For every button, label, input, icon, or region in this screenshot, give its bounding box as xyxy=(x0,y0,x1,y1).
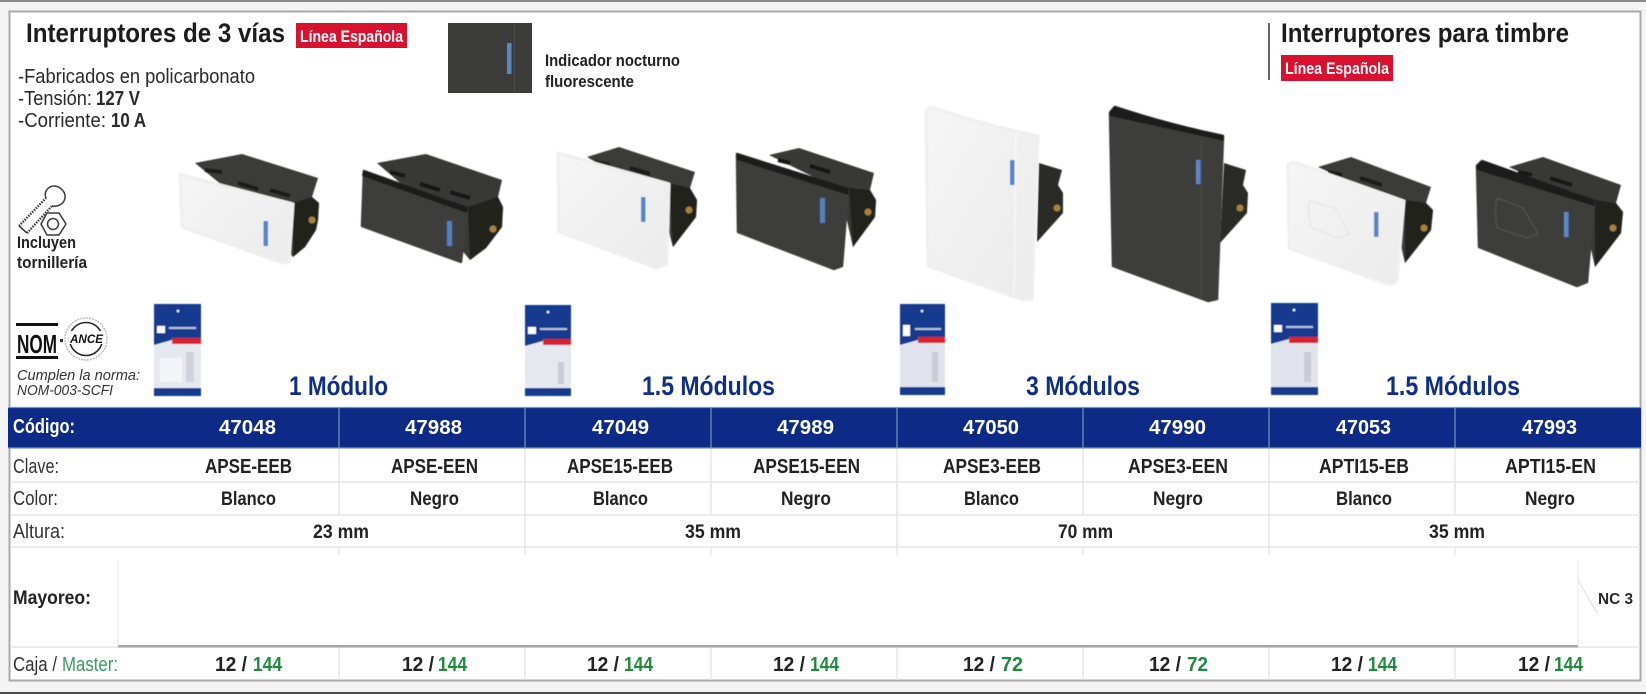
product: switch 47990 black tall xyxy=(1109,106,1248,301)
table row: Caja / Master: 144 xyxy=(438,654,468,676)
table row: Clave: APSE-EEN xyxy=(391,456,478,478)
table row: Caja / Master: 12 / xyxy=(402,654,434,676)
module label: 1.5 Módulos: 1.5 Módulos xyxy=(642,371,775,401)
text block: Indicador nocturno fluorescente: fluorescente xyxy=(545,73,634,91)
table row: Color: Blanco xyxy=(1336,489,1392,510)
table row: Color: Color: xyxy=(13,488,58,510)
text block: specifications: -Corriente: xyxy=(18,110,106,132)
table row: Caja / Master: 144 xyxy=(624,654,654,676)
table row: Caja / Master: 144 xyxy=(1368,654,1398,676)
table row: Clave: APSE3-EEN xyxy=(1128,456,1228,478)
table row: Color xyxy=(13,488,1575,510)
table row: Caja / Master: 12 / xyxy=(1331,654,1363,676)
text block: norm note xyxy=(17,367,140,399)
table header: Código row xyxy=(8,407,1641,448)
text block: norm note: NOM-003-SCFI xyxy=(17,382,113,399)
table row: Caja / Master xyxy=(13,654,1584,676)
table row: Clave: APSE3-EEB xyxy=(943,456,1041,478)
table row: Color: Blanco xyxy=(964,489,1019,510)
text block: specifications: 127 V xyxy=(96,88,141,110)
table row: Mayoreo: Mayoreo: xyxy=(13,588,91,609)
icon: night indicator swatch xyxy=(448,23,532,93)
text block: Indicador nocturno fluorescente: Indicador nocturno xyxy=(545,52,680,70)
table header: Código row: Código: xyxy=(13,416,75,438)
table row: Color: Blanco xyxy=(221,489,276,510)
product: switch 47050 white tall xyxy=(926,107,1063,300)
table row: Caja / Master: 12 / xyxy=(1149,654,1181,676)
table row: Caja / Master: Master: xyxy=(62,654,118,676)
table row: Caja / Master: 144 xyxy=(810,654,840,676)
product: switch 47049 white xyxy=(558,147,697,268)
heading: Interruptores de 3 vías: Interruptores de 3 vías xyxy=(26,18,285,48)
table header: Código row: 47049 xyxy=(592,417,649,439)
table row: Altura: Altura: xyxy=(13,521,65,543)
table row: Caja / Master: 72 xyxy=(1001,654,1023,676)
product image: package 1 Módulo xyxy=(154,304,201,396)
text block: specifications: -Fabricados en policarbonato xyxy=(18,66,255,88)
table row: Mayoreo xyxy=(13,560,1633,648)
text block: Incluyen tornillería: Incluyen xyxy=(17,233,76,252)
logo: NOM: NOM xyxy=(17,329,57,359)
table row: Clave: APSE-EEB xyxy=(205,456,292,478)
table row: Clave: Clave: xyxy=(13,456,59,478)
table row: Altura: 35 mm xyxy=(1429,522,1485,543)
product: switch 47989 black xyxy=(736,148,876,269)
module label: timbre 1.5 Módulos: 1.5 Módulos xyxy=(1386,371,1520,401)
text block: Indicador nocturno fluorescente xyxy=(545,52,680,91)
table row: Color: Negro xyxy=(781,489,831,510)
table row: Caja / Master: 12 / xyxy=(215,654,247,676)
heading: Interruptores para timbre: Interruptores para timbre xyxy=(1281,18,1569,48)
product image: package 3 Módulos xyxy=(900,304,945,395)
table row: Clave: APSE15-EEN xyxy=(753,456,860,478)
table row: Caja / Master: 72 xyxy=(1187,654,1208,676)
table header: Código row: 47048 xyxy=(219,417,276,439)
table row: Color: Negro xyxy=(410,489,459,510)
table row: Clave: APTI15-EN xyxy=(1505,456,1596,478)
product image: package 1.5 Módulos xyxy=(525,305,571,396)
table row: Altura: 70 mm xyxy=(1058,522,1113,543)
icon: screw and nut xyxy=(19,186,66,235)
table header: Código row: 47990 xyxy=(1149,417,1206,439)
table header: Código row: 47050 xyxy=(963,417,1019,439)
text block: norm note: Cumplen la norma: xyxy=(17,367,140,384)
table row: Color: Blanco xyxy=(593,489,648,510)
table row: Color: Negro xyxy=(1525,489,1575,510)
product: switch 47048 white xyxy=(180,154,319,263)
table row: Mayoreo: NC 3 xyxy=(1598,591,1633,608)
product image: package timbre 1.5 Módulos xyxy=(1271,303,1318,395)
table header: Código row: 47053 xyxy=(1336,417,1391,439)
text block: specifications xyxy=(18,66,255,132)
table row: Caja / Master: 12 / xyxy=(963,654,995,676)
product: bell switch 47993 black xyxy=(1476,157,1623,286)
table row: Clave: APSE15-EEB xyxy=(567,456,673,478)
table row: Caja / Master: 144 xyxy=(1554,654,1584,676)
table row: Clave xyxy=(13,456,1596,478)
table header: Código row: 47988 xyxy=(405,417,462,439)
product: switch 47988 black xyxy=(362,154,503,262)
badge: Línea Española timbre xyxy=(1281,55,1393,81)
logo: ANCE xyxy=(60,318,107,360)
badge: Línea Española xyxy=(296,23,407,48)
logo: NOM xyxy=(16,323,58,359)
table row: Caja / Master: 12 / xyxy=(773,654,805,676)
text block: Incluyen tornillería xyxy=(17,233,87,272)
table row: Caja / Master: 12 / xyxy=(587,654,619,676)
badge: Línea Española: Línea Española xyxy=(300,27,403,46)
module label: 3 Módulos: 3 Módulos xyxy=(1026,371,1140,401)
table row: Color: Negro xyxy=(1153,489,1203,510)
table row: Altura: 23 mm xyxy=(313,522,369,543)
table row: Altura: 35 mm xyxy=(685,522,741,543)
table row: Clave: APTI15-EB xyxy=(1319,456,1409,478)
table row: Caja / Master: 144 xyxy=(253,654,283,676)
table header: Código row: 47989 xyxy=(777,417,834,439)
module label: 1 Módulo: 1 Módulo xyxy=(289,371,388,401)
badge: Línea Española timbre: Línea Española xyxy=(1285,59,1389,78)
text block: Incluyen tornillería: tornillería xyxy=(17,253,87,272)
table row: Caja / Master: 12 / xyxy=(1518,654,1550,676)
table row: Caja / Master: Caja / xyxy=(13,654,57,676)
product: bell switch 47053 white xyxy=(1288,157,1433,285)
table row: Altura xyxy=(13,521,1485,543)
logo: ANCE: ANCE xyxy=(69,332,104,346)
text block: specifications: 10 A xyxy=(111,110,146,132)
table header: Código row: 47993 xyxy=(1522,417,1577,439)
table: product data xyxy=(8,407,1641,680)
text block: specifications: -Tensión: xyxy=(18,88,92,110)
